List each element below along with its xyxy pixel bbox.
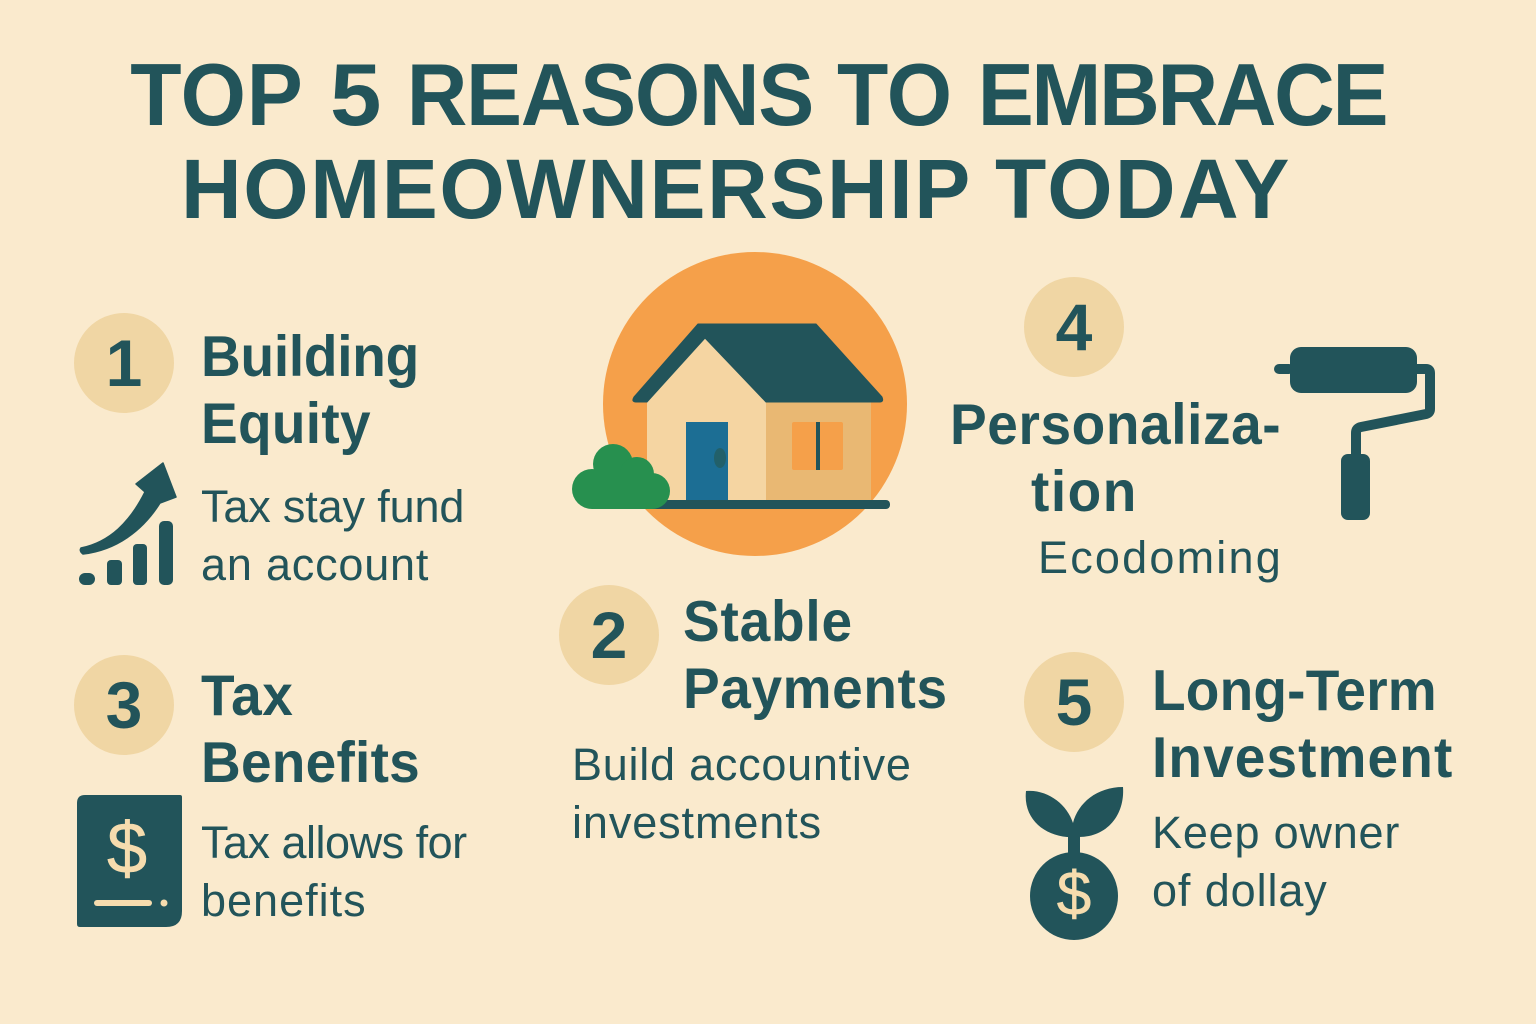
text: reason 4: Ecodoming — [1038, 532, 1283, 583]
number badge 4: 4 — [1056, 290, 1092, 364]
heading: Personalization: Personaliza- — [950, 392, 1281, 456]
text: reason 1 — [201, 481, 464, 590]
number badge 3 — [74, 655, 174, 755]
heading: Building Equity: Building — [201, 324, 419, 388]
icon: dollar book — [77, 795, 182, 927]
icon: growth chart — [79, 462, 177, 585]
icon: dollar book: $ — [107, 809, 147, 889]
text: reason 2: Build accountive — [572, 739, 912, 790]
title: EMBRACE — [978, 45, 1386, 144]
heading: Personalization: tion — [1031, 459, 1138, 523]
number badge 4 — [1024, 277, 1124, 377]
panel: reason 2 — [559, 585, 948, 848]
heading: Tax Benefits — [201, 663, 420, 794]
number badge 1 — [74, 313, 174, 413]
panel: reason 5 — [1024, 652, 1453, 940]
heading: Tax Benefits: Benefits — [201, 730, 420, 794]
heading: Personalization — [950, 392, 1281, 523]
text: reason 3: benefits — [201, 875, 367, 926]
title: TOP — [130, 45, 303, 144]
title: TO — [837, 45, 952, 144]
panel: reason 4 — [950, 277, 1435, 583]
text: reason 5: Keep owner — [1152, 807, 1400, 858]
icon: money plant: $ — [1057, 860, 1091, 929]
heading: Stable Payments — [683, 589, 948, 720]
heading: Stable Payments: Stable — [683, 589, 853, 653]
panel: reason 3 — [74, 655, 467, 927]
number badge 1: 1 — [106, 326, 142, 400]
panel: reason 1 — [74, 313, 464, 590]
number badge 2 — [559, 585, 659, 685]
heading: Long-Term Investment: Long-Term — [1152, 658, 1437, 722]
title: 5 — [330, 45, 381, 144]
title: REASONS — [407, 45, 813, 144]
illustration: house — [572, 252, 907, 556]
number badge 5: 5 — [1056, 665, 1092, 739]
text: reason 5 — [1152, 807, 1400, 916]
icon: paint roller — [1274, 347, 1435, 520]
heading: Tax Benefits: Tax — [201, 663, 294, 727]
text: reason 1: Tax stay fund — [201, 481, 464, 532]
number badge 5 — [1024, 652, 1124, 752]
text: reason 3 — [201, 817, 467, 926]
heading: Long-Term Investment — [1152, 658, 1453, 789]
heading: Stable Payments: Payments — [683, 656, 948, 720]
text: reason 1: an account — [201, 539, 429, 590]
title — [130, 45, 1386, 236]
text: reason 2: investments — [572, 797, 822, 848]
text: reason 2 — [572, 739, 912, 848]
title: TODAY — [995, 141, 1292, 236]
text: reason 3: Tax allows for — [201, 817, 467, 868]
heading: Long-Term Investment: Investment — [1152, 725, 1453, 789]
title: HOMEOWNERSHIP — [181, 141, 972, 236]
heading: Building Equity: Equity — [201, 391, 371, 455]
number badge 3: 3 — [106, 668, 142, 742]
text: reason 5: of dollay — [1152, 865, 1328, 916]
heading: Building Equity — [201, 324, 419, 455]
icon: money plant — [1026, 787, 1124, 940]
number badge 2: 2 — [591, 598, 627, 672]
